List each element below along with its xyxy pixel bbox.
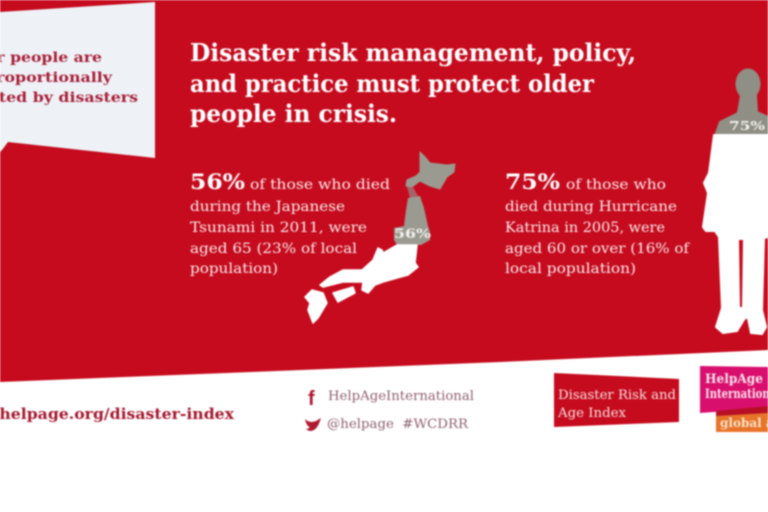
logo: HelpAge International bbox=[700, 366, 768, 432]
person label: 75% bbox=[729, 119, 766, 133]
map label: 56% bbox=[394, 227, 432, 242]
facebook handle: HelpAgeInternational bbox=[328, 389, 474, 404]
statistic: Japanese tsunami: during the Japanese bbox=[190, 199, 345, 215]
statistic: Hurricane Katrina: died during Hurricane bbox=[505, 199, 677, 215]
icon: map of Japan bbox=[305, 152, 455, 323]
icon: facebook: f bbox=[308, 388, 315, 410]
statistic: Hurricane Katrina: 75% bbox=[505, 169, 560, 194]
icon: person silhouette bbox=[703, 68, 768, 334]
statistic: Japanese tsunami: 56% bbox=[190, 169, 245, 194]
icon: twitter bbox=[305, 418, 321, 431]
logo: HelpAge International: HelpAge bbox=[705, 372, 763, 387]
badge: Disaster Risk and Age Index bbox=[554, 373, 679, 427]
badge: Disaster Risk and Age Index: Age Index bbox=[557, 406, 627, 421]
statistic: Hurricane Katrina: aged 60 or over (16% of bbox=[505, 241, 690, 257]
statistic: Hurricane Katrina bbox=[505, 169, 690, 277]
statistic: Japanese tsunami: population) bbox=[190, 261, 278, 277]
statistic: Japanese tsunami: of those who died bbox=[250, 177, 390, 193]
heading bbox=[190, 38, 636, 128]
statistic: Japanese tsunami: Tsunami in 2011, were bbox=[190, 220, 367, 236]
heading: Disaster risk management, policy, bbox=[190, 38, 636, 67]
red background panel bbox=[0, 0, 768, 382]
statistic: Hurricane Katrina: local population) bbox=[505, 261, 636, 277]
heading: and practice must protect older bbox=[190, 69, 594, 98]
heading: people in crisis. bbox=[190, 99, 397, 128]
statistic: Hurricane Katrina: of those who bbox=[566, 177, 666, 193]
badge: Disaster Risk and Age Index: Disaster Risk and bbox=[558, 388, 676, 403]
callout: older people bbox=[0, 2, 155, 158]
statistic: Japanese tsunami: aged 65 (23% of local bbox=[190, 241, 357, 257]
statistic: Japanese tsunami bbox=[190, 169, 390, 277]
twitter handle and hashtag: @helpage #WCDRR bbox=[327, 417, 469, 432]
statistic: Hurricane Katrina: Katrina in 2005, were bbox=[505, 220, 665, 236]
callout text bbox=[0, 50, 138, 106]
